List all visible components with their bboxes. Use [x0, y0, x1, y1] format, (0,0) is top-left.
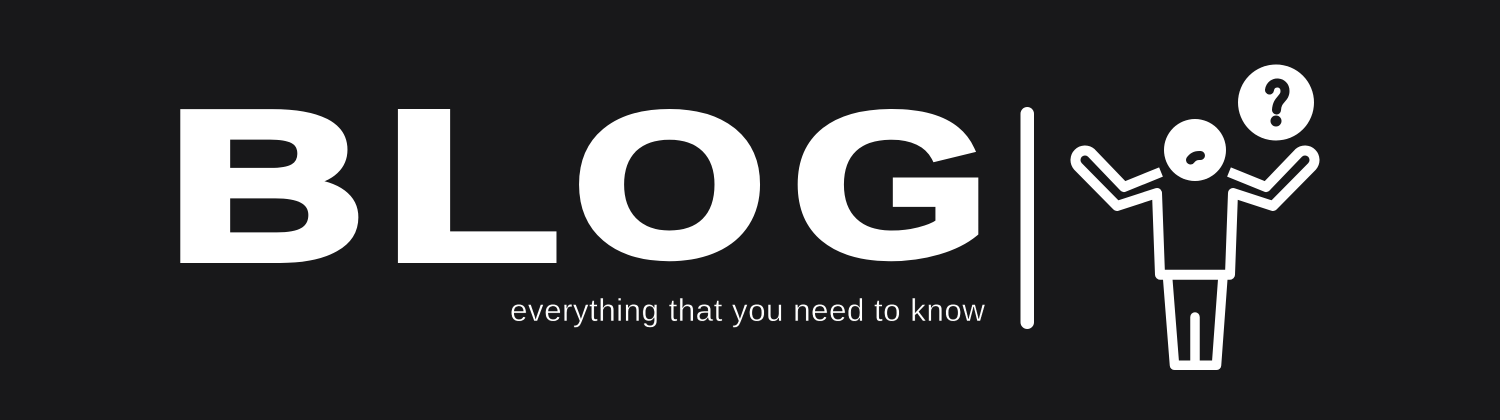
icon: question mark bubble	[1238, 64, 1314, 140]
icon: confused person shrugging	[1075, 64, 1315, 365]
vertical divider	[1020, 107, 1034, 329]
title: BLOG: L	[384, 67, 560, 304]
icon: arms and torso outline	[1075, 150, 1315, 275]
title: BLOG: B	[167, 68, 366, 305]
title: BLOG: G	[792, 71, 989, 299]
tagline: everything that you need to know	[510, 292, 985, 328]
title: BLOG: O	[574, 72, 766, 300]
icon: legs	[1168, 276, 1223, 365]
title: BLOG	[167, 67, 989, 305]
icon: head	[1164, 119, 1226, 181]
